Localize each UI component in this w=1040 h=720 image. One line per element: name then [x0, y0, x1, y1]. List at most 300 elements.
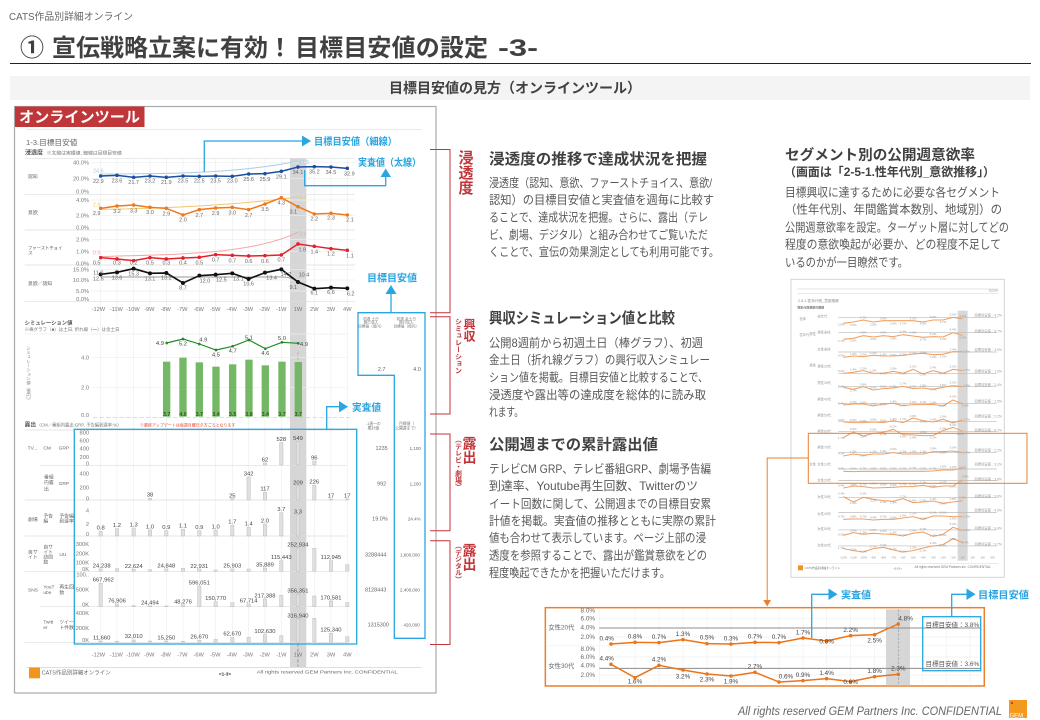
thumbnail value labels: 1.7%: [963, 418, 970, 422]
first choice line chart: 0.4: [179, 261, 187, 267]
thumbnail value labels: 3.0%: [950, 446, 957, 450]
thumbnail value labels: 2.5%: [963, 368, 970, 372]
body: 浸透度（認知、意欲、ファーストチョイス、意欲/: [489, 176, 713, 190]
YouTube plays bars: 596,051: [189, 580, 210, 586]
footer copyright: All rights reserved GEM Partners Inc. CONFIDENTIAL: [737, 706, 1002, 718]
bracket: simulation: 興収: [462, 318, 476, 343]
row labels and ticks: 意欲／認知: [28, 280, 52, 287]
row labels and ticks: 0.0%: [76, 261, 89, 267]
TV program GRP bars: 342: [244, 471, 254, 477]
thumbnail value labels: 0.5%: [950, 420, 957, 424]
thumbnail target labels: 目標目安値：3.4%: [974, 525, 1002, 530]
YouTube plays bars: YouT: [43, 584, 54, 590]
first choice line chart: 2.6: [299, 232, 306, 238]
TV CM GRP bars: 1,100: [410, 446, 421, 451]
thumbnail target labels: 目標目安値：1.0%: [974, 368, 1002, 373]
exposure header: 露出: [25, 420, 36, 428]
TV program GRP bars: GRP: [59, 481, 69, 487]
intent line chart: 3.0: [146, 210, 154, 216]
own site UU bars: 数: [43, 558, 48, 565]
thumbnail value labels: 2.6%: [950, 516, 957, 520]
row labels and ticks: 20.0%: [73, 176, 89, 182]
thumbnail value labels: 1.8%: [920, 383, 927, 387]
target value column: 興行収入: [364, 320, 379, 325]
panel: segment thumbnail: -2W: [940, 556, 946, 560]
awareness line chart: 23.5: [210, 179, 221, 185]
thumbnail value labels: 1.0%: [890, 384, 897, 388]
target value column: 初週 土日: [363, 316, 379, 321]
first choice line chart: 0.7: [228, 258, 236, 264]
female 20s line: 0.7%: [652, 634, 667, 641]
thumbnail value labels: 2.0%: [850, 528, 857, 532]
Twitter tweets bars: 11,660: [93, 635, 111, 641]
intent over awareness line chart: 15.3: [128, 271, 139, 277]
awareness line chart: 25.9: [260, 177, 270, 183]
thumbnail value labels: 3.0%: [880, 316, 887, 320]
TV program GRP bars: 0: [86, 497, 89, 503]
intent line chart: 3.1: [289, 210, 297, 216]
Twitter tweets bars: ツイー: [59, 621, 74, 626]
thumbnail footer: <2-5-1>: [893, 567, 903, 570]
row labels and ticks: 10.0%: [73, 278, 89, 284]
own site UU bars: 112,945: [321, 555, 341, 561]
intent line chart: 2.8: [93, 203, 100, 209]
female 30s line: 0.9%: [796, 672, 811, 679]
thumbnail segment labels: 女性: [809, 461, 817, 466]
intent line chart: 2.0: [179, 218, 187, 224]
bracket: exposure digital: （デジタル）: [454, 542, 462, 583]
YouTube plays bars: 170,581: [320, 595, 342, 601]
thumbnail segment labels: 女性30代: [817, 494, 832, 499]
intent line chart: 3.3: [130, 208, 137, 214]
body: 透度を参照することで、露出が鑑賞意欲をどの: [489, 548, 707, 562]
TV program GRP bars: 992: [377, 481, 386, 487]
thumbnail value labels: 4.8%: [962, 474, 969, 478]
heading: 興収シミュレーション値と比較: [489, 309, 675, 327]
simulation line chart: [156, 335, 308, 359]
theater trailer bars: 2: [86, 522, 89, 528]
theater trailer bars: 3.7: [277, 507, 285, 513]
thumbnail value labels: 0.9%: [870, 418, 877, 422]
week axis: -10W: [126, 307, 140, 313]
female 30s line: 1.9%: [724, 678, 739, 685]
intent line chart: 2.7: [245, 213, 252, 219]
intent over awareness line chart: 13.6: [112, 275, 122, 281]
TV CM GRP bars: TV...: [28, 446, 37, 452]
thumbnail value labels: 4.4%: [838, 491, 845, 495]
week axis: -5W: [210, 653, 221, 659]
female 20s line: 1.7%: [796, 629, 811, 636]
theater trailer bars: 3.3: [294, 509, 302, 515]
first choice line chart: [93, 232, 354, 267]
theater trailer bars: 1.1: [179, 524, 187, 530]
week axis: -9W: [144, 653, 155, 659]
intent over awareness line chart: 6.1: [310, 291, 318, 297]
axis labels: [548, 608, 595, 679]
thumbnail value labels: 3.2%: [910, 364, 917, 368]
thumbnail value labels: 2.6%: [910, 414, 917, 418]
thumbnail value labels: 4.8%: [950, 537, 957, 541]
theater trailer bars: 予告編: [59, 512, 74, 519]
YouTube plays bars: 150,770: [205, 596, 227, 602]
bracket: penetration: 浸透度: [456, 150, 474, 196]
intent over awareness line chart: 12.6: [93, 277, 104, 283]
target value column: 4.0: [413, 367, 421, 373]
thumbnail value labels: 2.5%: [850, 323, 857, 327]
thumbnail value labels: 2.0%: [890, 447, 897, 451]
own site UU bars: イト: [43, 550, 53, 555]
thumbnail value labels: 0.7%: [860, 466, 867, 470]
intent line chart: 2.7: [196, 213, 203, 219]
simulation y axis: 4.0: [81, 356, 89, 362]
axis labels: 2.0%: [581, 672, 595, 679]
row labels and ticks: 40.0%: [73, 161, 89, 167]
Twitter tweets bars: 102,630: [254, 629, 276, 635]
panel: segment thumbnail: 2W: [970, 556, 975, 560]
own site UU bars: 22,931: [190, 564, 208, 570]
awareness line chart: 32.9: [344, 171, 355, 177]
thumbnail value labels: 2.3%: [880, 500, 887, 504]
thumbnail value labels: 0.5%: [920, 466, 927, 470]
simulation y axis: [26, 346, 89, 419]
row labels and ticks: 15.0%: [73, 267, 89, 273]
exposure header: 目標値（: [399, 421, 414, 426]
simulation line chart: 4.9: [156, 341, 164, 347]
thumbnail value labels: 1.7%: [838, 546, 845, 550]
week axis: -8W: [160, 307, 171, 313]
thumbnail segment labels: 男性20代: [817, 363, 832, 368]
thumbnail value labels: 3.7%: [900, 321, 907, 325]
body: くことで、宣伝の効果測定としても利用可能です。: [489, 245, 719, 259]
female 20s line: 0.7%: [748, 634, 763, 641]
TV program GRP bars: 内露: [44, 479, 54, 486]
simulation line chart: 5.2: [179, 342, 187, 348]
TV program GRP bars: 出: [44, 485, 49, 492]
awareness line chart: 23.0: [227, 179, 238, 185]
thumbnail value labels: 2.9%: [963, 528, 970, 532]
panel: segment thumbnail: -7W: [891, 556, 896, 560]
intent line chart: [93, 195, 354, 224]
target value column: 目標値（億円）: [358, 323, 384, 328]
female 20s line: 0.5%: [700, 635, 715, 642]
theater trailer bars: 24.4%: [408, 517, 421, 522]
target value labels: 目標目安値：3.6%: [926, 659, 980, 668]
theater trailer bars: 1.0: [146, 524, 155, 530]
thumbnail value labels: 0.8%: [930, 484, 937, 488]
thumbnail value labels: 3.2%: [880, 543, 887, 547]
thumbnail value labels: 0.6%: [940, 502, 947, 506]
icon: GEM logo: [1009, 700, 1027, 720]
screenshot footer: <1-3>: [219, 672, 231, 677]
week axis: -2W: [259, 653, 270, 659]
thumbnail value labels: 2.7%: [850, 400, 857, 404]
intent line chart: 2.1: [346, 218, 354, 224]
thumbnail value labels: 1.7%: [838, 436, 845, 440]
axis labels: 8.0%: [581, 608, 595, 615]
intent over awareness line chart: 13.4: [266, 276, 277, 282]
week axis: 4W: [343, 653, 352, 659]
simulation y axis: シミュレーション値（億円）: [26, 346, 31, 402]
thumbnail value labels: 0.9%: [930, 417, 937, 421]
thumbnail value labels: 2.0%: [962, 404, 969, 408]
simulation header: シミュレーション値: [25, 318, 73, 326]
week axis: 3W: [327, 653, 336, 659]
TV program GRP bars: 200: [80, 486, 89, 492]
female 20s line: 2.5%: [867, 638, 882, 645]
panel: segment thumbnail: 1W: [960, 556, 965, 560]
theater trailer bars: 2.0: [261, 518, 270, 524]
week axis: -5W: [210, 307, 221, 313]
thumbnail value labels: 2.1%: [920, 549, 927, 553]
YouTube plays bars: 500K: [76, 588, 89, 594]
TV program GRP bars: 226: [309, 480, 319, 486]
Twitter tweets bars: [43, 611, 420, 644]
thumbnail target labels: 目標目安値：3.8%: [974, 477, 1002, 482]
thumbnail value labels: 1.6%: [880, 529, 887, 533]
body: ることで、達成状況を把握。さらに、露出（テレ: [489, 210, 708, 224]
thumbnail value labels: 1.3%: [910, 546, 917, 550]
thumbnail value labels: 0.8%: [838, 418, 845, 422]
thumbnail value labels: 3.7%: [920, 338, 927, 342]
thumbnail value labels: 0.5%: [890, 515, 897, 519]
thumbnail value labels: 2.7%: [838, 339, 845, 343]
body: ビ、劇場、デジタル）と組み合わせてご覧いただ: [489, 227, 708, 242]
thumbnail value labels: 6.0%: [870, 427, 877, 431]
thumbnail value labels: 1.7%: [920, 481, 927, 485]
YouTube plays bars: [28, 573, 420, 609]
thumbnail value labels: 2.4%: [930, 366, 937, 370]
week axis: -1W: [276, 307, 287, 313]
thumbnail value labels: 3.2%: [950, 380, 957, 384]
intent over awareness line chart: 10.6: [243, 281, 254, 287]
awareness line chart: 25.6: [243, 177, 254, 183]
heading: 浸透度の推移で達成状況を把握: [489, 150, 707, 168]
thumbnail value labels: 3.4%: [930, 541, 937, 545]
first choice line chart: 0.7: [277, 258, 285, 264]
week axis: -6W: [193, 653, 204, 659]
YouTube plays bars: 356,351: [287, 589, 309, 595]
thumbnail target labels: 目標目安値：2.2%: [974, 414, 1002, 419]
own site UU bars: 35,889: [256, 563, 274, 569]
YouTube plays bars: 再生回: [59, 583, 74, 590]
thumbnail value labels: 1.4%: [890, 400, 897, 404]
thumbnail value labels: 1.0%: [850, 352, 857, 356]
exposure header: （CM／番組内露出:GRP, 予告編到達率:%）: [37, 421, 121, 428]
female 30s line: 3.2%: [676, 673, 691, 680]
first choice line chart: 0.6: [245, 259, 252, 265]
body: （性年代別、年間鑑賞本数別、地域別）の: [785, 202, 1002, 216]
intent over awareness line chart: 12.0: [200, 279, 210, 285]
row labels and ticks: 0.0%: [76, 190, 89, 196]
simulation header: [25, 318, 120, 333]
week axis: 1W: [294, 307, 303, 313]
thumbnail value labels: 2.6%: [910, 435, 917, 439]
YouTube plays bars: 76,906: [108, 598, 126, 604]
thumbnail value labels: 0.5%: [890, 466, 897, 470]
thumbnail value labels: 0.4%: [930, 534, 937, 538]
highlight box with arrow to enlarged chart: [763, 433, 1027, 606]
female 20s line: 0.8%: [628, 634, 643, 641]
text block: segment intent: [784, 146, 1009, 270]
YouTube plays bars: 8128443: [365, 587, 386, 593]
week axis: -7W: [177, 653, 188, 659]
own site UU bars: 24,848: [157, 563, 175, 569]
Twitter tweets bars: 420,000: [404, 622, 420, 627]
thumbnail value labels: 3.8%: [890, 337, 897, 341]
TV program GRP bars: 17: [328, 494, 334, 500]
thumbnail value labels: 2.1%: [930, 436, 937, 440]
body: 計値を掲載。実査値の推移とともに実際の累計: [489, 513, 716, 528]
theater trailer bars: 劇場: [28, 516, 38, 523]
awareness line chart: 34.5: [326, 170, 336, 176]
TV program GRP bars: 25: [229, 494, 236, 500]
simulation bar chart: 3.7: [196, 412, 203, 418]
week axis: -4W: [226, 307, 237, 313]
thumbnail value labels: 3.0%: [920, 527, 927, 531]
TV program GRP bars: 番組: [44, 473, 54, 480]
thumbnail value labels: 3.8%: [930, 315, 937, 319]
thumbnail value labels: 0.9%: [920, 498, 927, 502]
own site UU bars: イト: [28, 555, 38, 560]
TV CM GRP bars: [28, 431, 421, 467]
own site UU bars: 25,903: [223, 563, 241, 569]
TV program GRP bars: 1,200: [410, 481, 421, 486]
thumbnail value labels: 0.9%: [860, 401, 867, 405]
thumbnail value labels: 4.9%: [880, 331, 887, 335]
target values outline: [358, 313, 425, 638]
week axis: -6W: [193, 307, 204, 313]
thumbnail value labels: 4.2%: [959, 314, 966, 318]
row labels and ticks: 1.0%: [76, 250, 89, 256]
body: イート回数に関して、公開週までの目標目安累: [489, 496, 711, 511]
panel: enlarged segment chart: [545, 608, 984, 686]
week axis: -12W: [92, 653, 106, 659]
axis labels: 6.0%: [581, 654, 595, 661]
screenshot footer: CATS作品別詳細オンライン: [42, 669, 111, 677]
thumbnail value labels: 2.7%: [963, 451, 970, 455]
week axis: -2W: [259, 307, 270, 313]
panel: segment thumbnail: -10W: [860, 556, 867, 560]
thumbnail value labels: 1.0%: [900, 513, 907, 517]
intent over awareness line chart: 12.5: [216, 278, 227, 284]
thumbnail value labels: 0.5%: [850, 466, 857, 470]
female 30s line: 4.2%: [652, 657, 667, 664]
thumbnail value labels: 6.4%: [950, 328, 957, 332]
thumbnail value labels: 3.0%: [900, 434, 907, 438]
thumbnail value labels: 0.7%: [880, 515, 887, 519]
thumbnail target labels: 目標目安値：5.7%: [974, 328, 1002, 333]
thumbnail segment labels: 男性70代: [817, 445, 832, 450]
thumbnail value labels: 5.0%: [940, 426, 947, 430]
week axis: -4W: [226, 653, 237, 659]
TV program GRP bars: 117: [260, 487, 270, 493]
axis labels: 2.0%: [581, 634, 595, 641]
thumbnail value labels: 2.4%: [838, 402, 845, 406]
body: 到達率、Youtube再生回数、Twitterのツ: [489, 478, 698, 493]
thumbnail value labels: 3.7%: [860, 316, 867, 320]
thumbnail value labels: 4.2%: [950, 394, 957, 398]
thumbnail target labels: 目標目安値：2.4%: [974, 382, 1002, 387]
thumbnail segment lines: [843, 317, 963, 552]
thumbnail value labels: 0.7%: [900, 483, 907, 487]
first choice line chart: 0.3: [113, 261, 121, 267]
own site UU bars: 1,600,000: [400, 552, 420, 557]
exposure header: 累計値: [368, 425, 379, 430]
exposure header: 公開週まで）: [395, 425, 418, 430]
intent over awareness line chart: 8.7: [179, 286, 187, 292]
thumbnail target labels: [974, 313, 1002, 547]
bracket: exposure digital: 露出: [462, 543, 478, 571]
simulation bar chart: 3.7: [278, 412, 286, 418]
theater trailer bars: 19.0%: [372, 517, 388, 523]
female 30s line: 0.6%: [779, 673, 794, 680]
callout: actual thick line: 実査値（太線）: [358, 156, 421, 169]
thumbnail value labels: 1.8%: [950, 497, 957, 501]
thumbnail value labels: 1.3%: [940, 354, 947, 358]
chart header: 1-3.目標目安値: [26, 137, 78, 147]
chart group: simulation: [25, 316, 421, 503]
page title: -3-: [498, 35, 538, 62]
theater trailer bars: 1.3: [130, 522, 138, 528]
text block: penetration: [489, 150, 719, 259]
thumbnail footer: CATS作品別詳細オンライン: [805, 566, 840, 570]
own site UU bars: 3288444: [365, 552, 386, 558]
week axis: -3W: [243, 653, 254, 659]
thumbnail value labels: 2.2%: [910, 512, 917, 516]
TV CM GRP bars: 549: [293, 436, 303, 442]
callout: actual value: [327, 401, 381, 429]
intent line chart: 2.9: [93, 211, 100, 217]
simulation bar chart: 3.4: [212, 412, 220, 418]
thumbnail segment labels: 性年代: [799, 332, 810, 337]
own site UU bars: 22,624: [125, 564, 143, 570]
thumbnail target lines: [838, 317, 997, 546]
body: 値も合わせて表示しています。ページ上部の浸: [489, 530, 706, 545]
thumbnail value labels: 1.1%: [910, 351, 917, 355]
thumbnail value labels: 8.4%: [950, 423, 957, 427]
thumbnail value labels: 3.1%: [930, 510, 937, 514]
first choice line chart: 1.1: [346, 253, 354, 259]
panel: segment thumbnail: 2-5-1.性年代別_意欲推移: [798, 298, 839, 303]
thumbnail value labels: 3.2%: [950, 364, 957, 368]
female 30s line: 1.4%: [819, 670, 834, 677]
body: 程度喚起できたかを把握いただけます。: [489, 565, 670, 580]
thumbnail value labels: 1.2%: [950, 465, 957, 469]
thumbnail value labels: 0.9%: [880, 385, 887, 389]
week axis: -11W: [110, 307, 124, 313]
row labels and ticks: 0.0%: [76, 226, 89, 232]
intent line chart: 2.3: [327, 216, 335, 222]
body: ション値を掲載。目標目安値と比較することで、: [489, 370, 708, 385]
thumbnail value labels: 0.5%: [880, 402, 887, 406]
intent line chart: 4.4: [299, 195, 306, 201]
thumbnail value labels: 0.7%: [900, 352, 907, 356]
row labels and ticks: [28, 161, 89, 303]
row labels and ticks: 意欲: [28, 209, 38, 216]
thumbnail value labels: 0.7%: [930, 466, 937, 470]
thumbnail value labels: 2.8%: [963, 384, 970, 388]
thumbnail value labels: 2.8%: [870, 323, 877, 327]
TV CM GRP bars: 1235: [376, 446, 388, 452]
simulation line chart: 4.5: [212, 353, 220, 359]
intent line chart: 4.3: [277, 201, 285, 207]
row labels and ticks: 4.0%: [76, 198, 89, 204]
thumbnail value labels: 0.9%: [838, 353, 845, 357]
thumbnail value labels: 0.3%: [890, 483, 897, 487]
TV CM GRP bars: 600: [80, 439, 89, 445]
thumbnail value labels: 0.7%: [900, 466, 907, 470]
callout: target value: [367, 272, 417, 313]
